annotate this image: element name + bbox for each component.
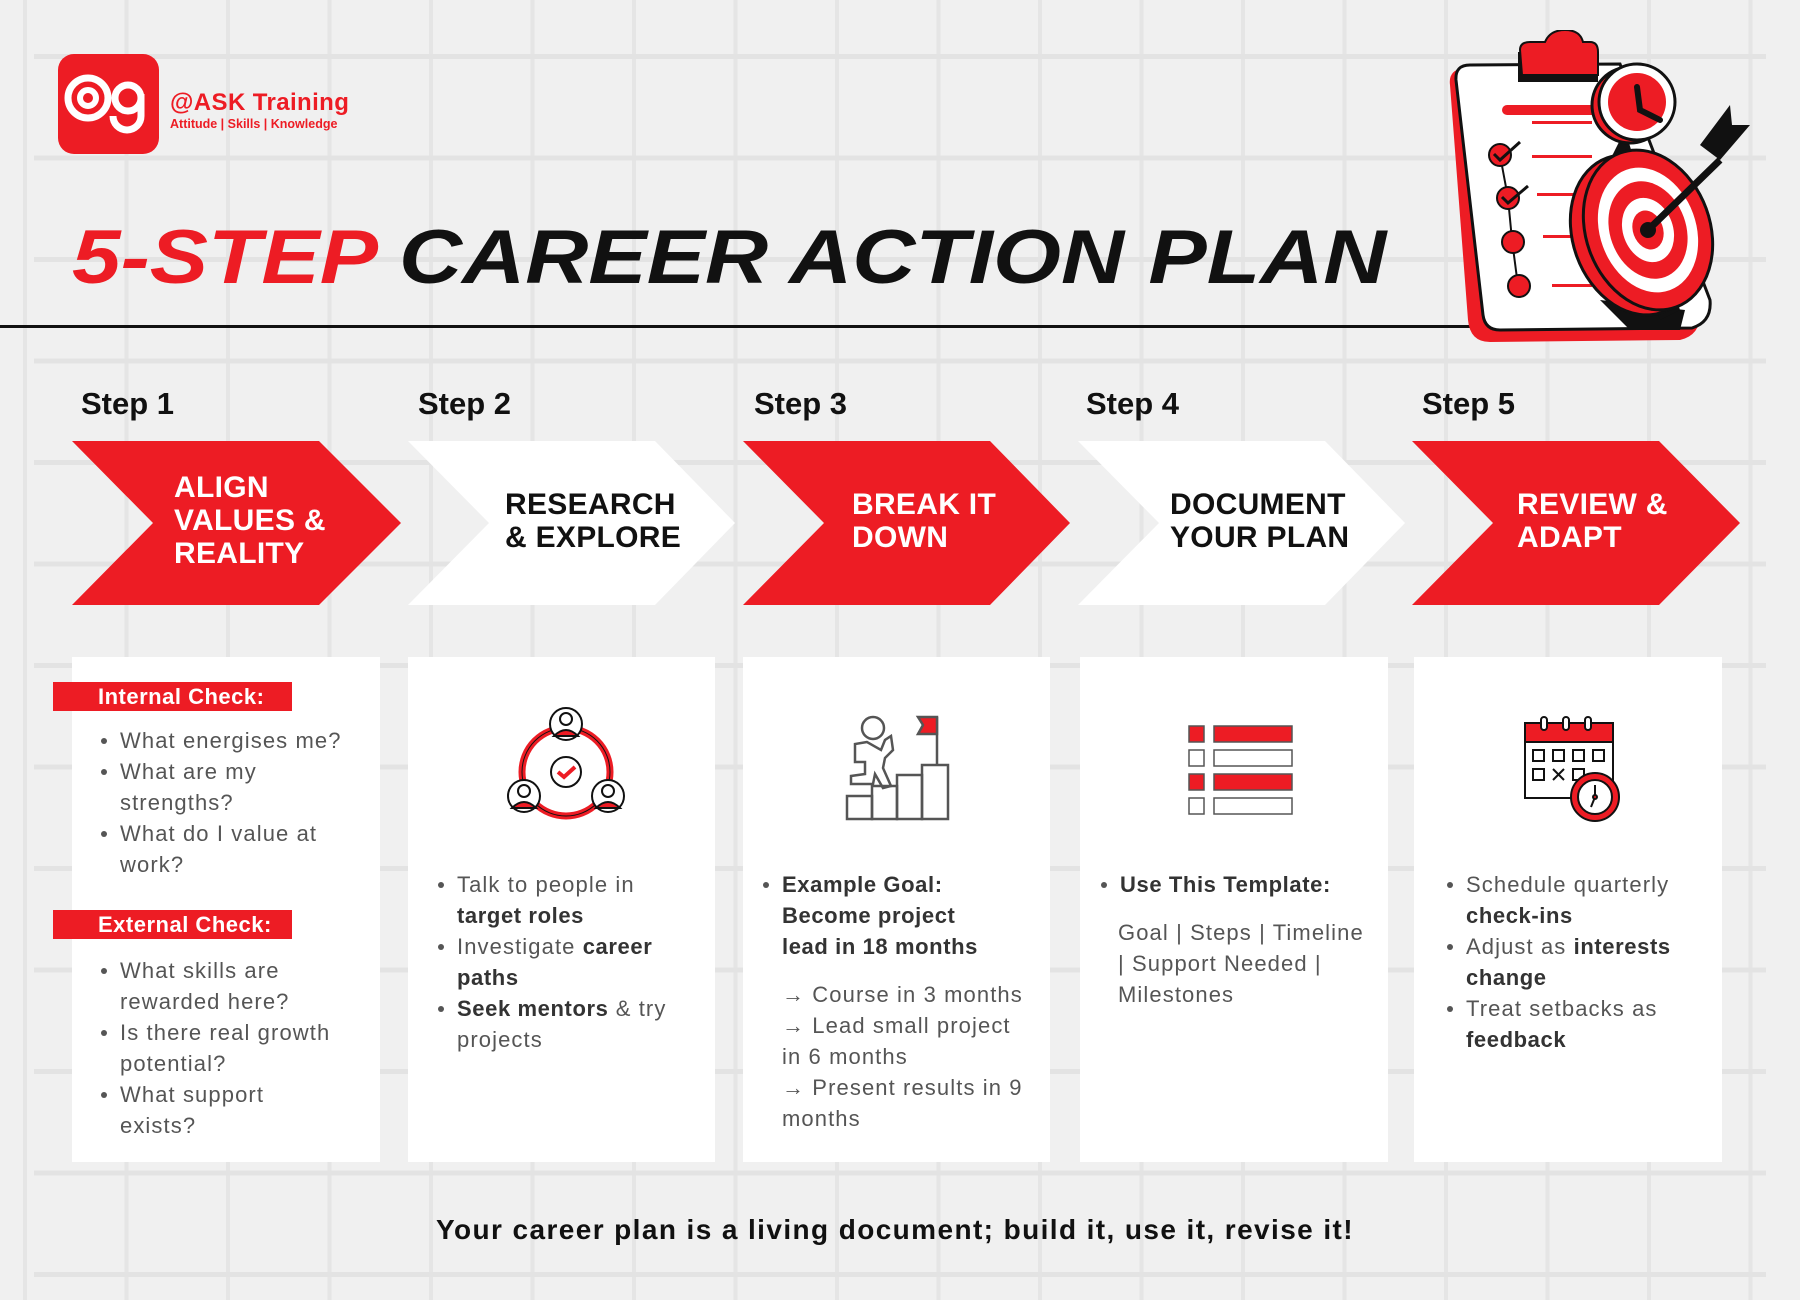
list: external: What support xyxy=(120,1082,264,1107)
list: step 2: Seek mentors & try projects xyxy=(457,996,666,1052)
chevron: step 5: ADAPT xyxy=(1517,521,1622,554)
list: step 5: Treat setbacks as feedback xyxy=(1466,996,1658,1052)
list: external: potential? xyxy=(120,1051,226,1076)
label: external check: External Check: xyxy=(98,912,272,937)
chevron: step 4: DOCUMENT xyxy=(1170,488,1346,521)
list: step 5: Schedule quarterly check-ins xyxy=(1466,872,1669,928)
list: external: What skills are xyxy=(120,958,280,983)
text: Step 5 xyxy=(1422,386,1515,421)
list: step 3: → Lead small project xyxy=(782,1013,1011,1038)
list: internal xyxy=(101,728,342,877)
list: step 4: Use This Template: xyxy=(1120,872,1331,897)
panel: step 1 card xyxy=(72,657,380,1162)
title: 5-STEP CAREER ACTION PLAN xyxy=(72,215,1386,300)
list: external: Is there real growth xyxy=(120,1020,330,1045)
list: step 3: in 6 months xyxy=(782,1044,908,1069)
list: step 3: → Present results in 9 xyxy=(782,1075,1023,1100)
icon: checklist template xyxy=(1188,725,1293,815)
list: external xyxy=(101,958,330,1138)
chevron: step 5: REVIEW & xyxy=(1517,488,1668,521)
panel: step 3 card xyxy=(743,657,1050,1162)
list: internal: What are my xyxy=(120,759,257,784)
chevron: step 1 xyxy=(72,441,401,605)
icon: network people xyxy=(507,707,625,820)
chevron: step 3: DOWN xyxy=(852,521,948,554)
chevron: step 5 xyxy=(1412,441,1740,605)
text: Step 4 xyxy=(1086,386,1179,421)
icon: climbing stairs xyxy=(846,716,950,820)
text: Step 3 xyxy=(754,386,847,421)
list: step 3 xyxy=(763,872,1023,1131)
brand name: @ASK Training xyxy=(170,89,349,116)
list: step 4: Milestones xyxy=(1118,982,1234,1007)
footer message: Your career plan is a living document; build it, use it, revise it! xyxy=(436,1214,1354,1245)
list: internal: strengths? xyxy=(120,790,234,815)
list: step 5 xyxy=(1447,872,1671,1052)
list: step 4 xyxy=(1101,872,1364,1007)
chevron: step 4 xyxy=(1078,441,1404,605)
panel: step 2 card xyxy=(408,657,715,1162)
tagline: Attitude | Skills | Knowledge xyxy=(170,117,337,131)
chevron: step 1: REALITY xyxy=(174,537,304,570)
chevron: step 2 xyxy=(408,441,735,605)
list: step 4: | Support Needed | xyxy=(1118,951,1322,976)
chevron: step 4: YOUR PLAN xyxy=(1170,521,1349,554)
list: step 2: Investigate career paths xyxy=(457,934,652,990)
list: internal: work? xyxy=(120,852,184,877)
list: internal: What energises me? xyxy=(120,728,342,753)
label: internal check: Internal Check: xyxy=(98,684,264,709)
illustration: clipboard with target xyxy=(1450,30,1750,342)
list: step 2: Talk to people in target roles xyxy=(457,872,635,928)
list: step 2 xyxy=(438,872,666,1052)
icon: logo mark xyxy=(58,54,159,154)
label: external check xyxy=(53,910,292,939)
chevron: step 2: RESEARCH xyxy=(505,488,676,521)
logo xyxy=(58,54,349,154)
chevron: step 3 xyxy=(743,441,1070,605)
text: Step 2 xyxy=(418,386,511,421)
panel: step 4 card xyxy=(1080,657,1388,1162)
list: external: exists? xyxy=(120,1113,196,1138)
chevron: step 3: BREAK IT xyxy=(852,488,996,521)
step labels: Step 1 xyxy=(81,386,174,421)
list: step 4: Goal | Steps | Timeline xyxy=(1118,920,1364,945)
chevron: step 1: ALIGN xyxy=(174,471,269,504)
list: external: rewarded here? xyxy=(120,989,290,1014)
list: step 3: Example Goal: xyxy=(782,872,943,897)
label: internal check xyxy=(53,682,292,711)
icon: calendar clock xyxy=(1524,716,1620,822)
list: step 3: months xyxy=(782,1106,861,1131)
list: internal: What do I value at xyxy=(120,821,317,846)
list: step 3: → Course in 3 months xyxy=(782,982,1023,1007)
list: step 5: Adjust as interests change xyxy=(1466,934,1671,990)
list: step 3: Become project xyxy=(782,903,955,928)
panel: step 5 card xyxy=(1414,657,1722,1162)
chevron: step 1: VALUES & xyxy=(174,504,326,537)
list: step 3: lead in 18 months xyxy=(782,934,978,959)
chevron: step 2: & EXPLORE xyxy=(505,521,681,554)
